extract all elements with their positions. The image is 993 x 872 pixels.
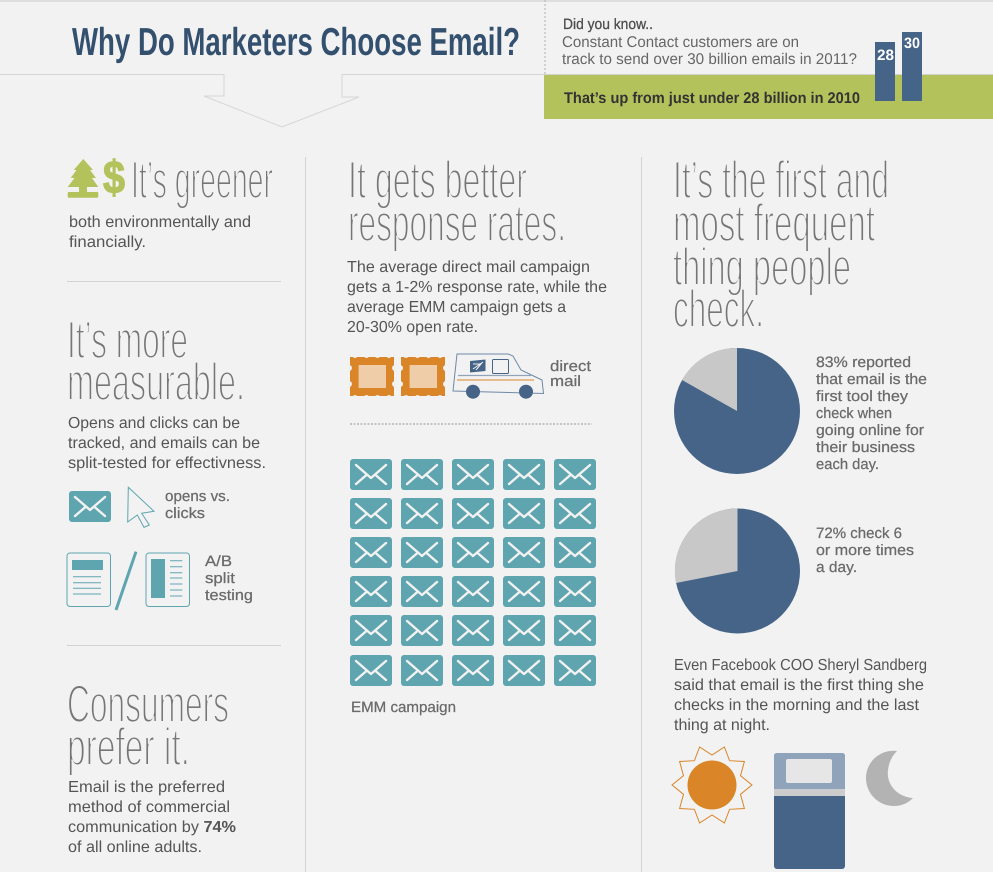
text block: Sandberg quote: Even Facebook COO Sheryl Sandberg: [674, 657, 927, 674]
panel: did you know: Did you know..: [563, 16, 653, 33]
text block: gets a 1-2% response rate, while the: [347, 279, 607, 296]
text block: 83%: [816, 354, 927, 473]
text block: Sandberg quote: [674, 657, 927, 734]
bar chart: 28 vs 30 billion: [875, 32, 922, 101]
heading: [348, 151, 566, 253]
icon: mail truck: [453, 354, 544, 399]
text block: [68, 415, 266, 472]
icon: dollar sign: $: [103, 151, 125, 203]
text block: Sandberg quote: said that email is the first thing she: [674, 677, 924, 694]
text block: communication by 74%: [68, 819, 236, 836]
icon grid: EMM envelopes: [350, 459, 596, 686]
heading: thing people: [673, 238, 851, 297]
panel: did you know: track to send over 30 billion emails in 2011?: [562, 51, 857, 68]
pie chart: 72%: [675, 508, 800, 634]
text block: method of commercial: [68, 799, 230, 816]
text block: 83%: check when: [816, 405, 892, 422]
text block: [69, 214, 251, 251]
text block: [68, 779, 236, 856]
heading: It’s more: [67, 311, 188, 370]
heading: Consumers: [67, 675, 229, 734]
text block: Email is the preferred: [68, 779, 225, 796]
text block: of all online adults.: [68, 839, 202, 856]
heading: [67, 675, 229, 777]
panel: it's greener: [68, 151, 273, 251]
text block: [347, 259, 607, 336]
label: EMM campaign: EMM campaign: [351, 699, 456, 716]
text block: Sandberg quote: thing at night.: [674, 717, 770, 734]
arrow: header pointing down: [0, 74, 544, 127]
title: Why Do Marketers Choose Email?: [72, 21, 520, 64]
text block: financially.: [69, 234, 146, 251]
text block: 72%: 72% check 6: [816, 525, 902, 542]
icon: layout A: [67, 553, 110, 606]
heading: response rates.: [348, 194, 566, 253]
label: opens vs clicks: opens vs.: [165, 488, 230, 505]
text block: split-tested for effectivness.: [68, 455, 266, 472]
icon: stamps: [346, 352, 449, 401]
bar chart: 28 vs 30 billion: 28: [877, 47, 894, 64]
heading: check.: [673, 280, 764, 339]
panel: did you know: [544, 0, 993, 119]
heading: [673, 151, 889, 339]
heading: measurable.: [67, 353, 245, 412]
panel: it's more measurable: [67, 311, 266, 610]
text block: both environmentally and: [69, 214, 251, 231]
label: opens vs clicks: clicks: [165, 505, 205, 522]
heading: [67, 311, 245, 412]
panel: first thing people check: [672, 151, 927, 869]
icon: sun: [672, 747, 752, 823]
heading: It’s greener: [131, 151, 273, 210]
label: A/B split testing: [205, 553, 253, 604]
label: direct mail: [550, 358, 592, 390]
text block: average EMM campaign gets a: [347, 299, 566, 316]
pie chart: 83%: [674, 348, 800, 474]
icon: slash divider: [116, 552, 136, 610]
icon: layout B: [146, 553, 190, 606]
text block: 83%: their business: [816, 439, 915, 456]
label: opens vs clicks: [165, 488, 230, 522]
text block: tracked, and emails can be: [68, 435, 260, 452]
text block: Sandberg quote: checks in the morning and the last: [674, 697, 920, 714]
label: A/B split testing: testing: [205, 587, 253, 604]
text block: 72%: or more times: [816, 542, 914, 559]
heading: It gets better: [348, 151, 527, 210]
panel: consumers prefer it: [67, 675, 236, 856]
icon: cursor: [128, 487, 154, 527]
label: direct mail: direct: [550, 358, 592, 375]
text block: 83%: 83% reported: [816, 354, 911, 371]
bar chart: 28 vs 30 billion: 30: [904, 35, 920, 52]
label: A/B split testing: split: [205, 570, 236, 587]
text block: 20-30% open rate.: [347, 319, 478, 336]
label: A/B split testing: A/B: [205, 553, 232, 570]
text block: Opens and clicks can be: [68, 415, 240, 432]
icon: tree: [68, 159, 98, 198]
icon: bed: [774, 753, 845, 869]
panel: did you know: That’s up from just under 28 billion in 2010: [564, 90, 860, 107]
text block: 83%: that email is the: [816, 371, 927, 388]
heading: prefer it.: [67, 718, 190, 777]
panel: did you know: Constant Contact customers are on: [562, 34, 799, 51]
text block: 72%: [816, 525, 914, 576]
heading: most frequent: [673, 194, 875, 253]
text block: 83%: each day.: [816, 456, 879, 473]
label: direct mail: mail: [550, 373, 581, 390]
text block: 72%: a day.: [816, 559, 857, 576]
icon: moon: [866, 751, 913, 806]
text block: 83%: first tool they: [816, 388, 909, 405]
text block: 83%: going online for: [816, 422, 924, 439]
text block: The average direct mail campaign: [347, 259, 590, 276]
icon: envelope: [69, 491, 111, 522]
panel: better response rates: [346, 151, 607, 716]
